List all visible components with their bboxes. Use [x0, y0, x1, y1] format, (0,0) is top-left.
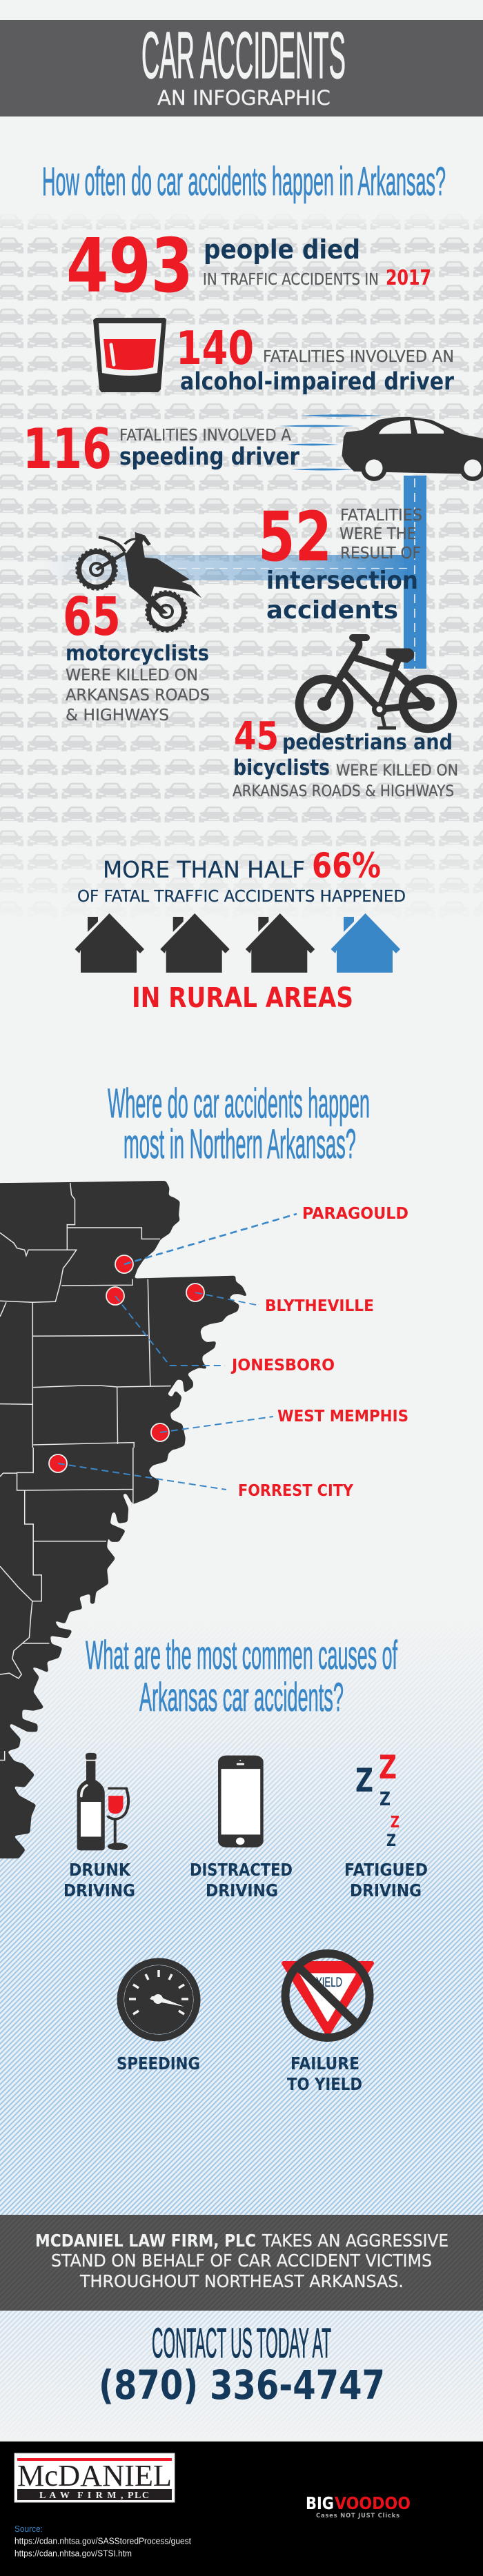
stat: 52 intersection accidents: intersection [266, 567, 418, 595]
icon: failure to yield sign [284, 1954, 372, 2038]
contact call to action: (870) 336-4747 [99, 2362, 385, 2408]
stat: 52 intersection accidents: 52 [258, 498, 332, 577]
sources: https://cdan.nhtsa.gov/SASStoredProcess/guest [14, 2535, 191, 2546]
icon: whiskey glass [93, 318, 166, 392]
map pin: West Memphis [151, 1423, 169, 1441]
label: fatigued driving: DRIVING [350, 1880, 422, 1900]
stat: 52 intersection accidents: WERE THE [339, 524, 416, 543]
stat: 65 motorcyclists: 65 [63, 587, 121, 648]
label: drunk driving: DRIVING [63, 1880, 135, 1900]
label: West Memphis: WEST MEMPHIS [277, 1406, 408, 1426]
stat: 45 pedestrians and bicyclists [233, 714, 458, 800]
stat: 493 people died [66, 223, 431, 310]
icon: failure to yield sign: YIELD [316, 1976, 342, 1990]
label: fatigued driving [344, 1860, 428, 1900]
map pin: Blytheville [186, 1284, 204, 1301]
logo: McDaniel Law Firm: McDANIEL [17, 2459, 172, 2493]
map of northeast Arkansas [0, 1181, 246, 1858]
stat: 45 pedestrians and bicyclists: pedestrians and [282, 730, 453, 755]
rural stat text: OF FATAL TRAFFIC ACCIDENTS HAPPENED [77, 886, 406, 906]
sources: https://cdan.nhtsa.gov/STSI.htm [14, 2548, 132, 2559]
rural stat text: 66% [312, 846, 381, 886]
label: Blytheville: BLYTHEVILLE [265, 1296, 374, 1315]
stat: 45 pedestrians and bicyclists: bicyclists [233, 755, 330, 780]
sources [14, 2524, 191, 2559]
hatched background [0, 1613, 483, 2442]
stat: 140 alcohol-impaired [176, 321, 455, 396]
stat: 52 intersection accidents: FATALITIES [340, 505, 422, 525]
stat: 116 speeding: FATALITIES INVOLVED A [119, 425, 291, 445]
label: distracted driving: DRIVING [206, 1880, 278, 1900]
car pattern background [0, 210, 483, 927]
stat: 493 people died: 2017 [386, 266, 431, 290]
icon: smartphone [218, 1756, 264, 1847]
stat: 65 motorcyclists [63, 587, 210, 724]
stat: 45 pedestrians and bicyclists: WERE KILLED ON [336, 762, 458, 780]
stat: 116 speeding: speeding driver [119, 443, 300, 471]
icon: wine bottle and glass [77, 1753, 128, 1850]
stat: 52 intersection accidents: accidents [266, 596, 398, 625]
law firm statement band: THROUGHOUT NORTHEAST ARKANSAS. [79, 2271, 404, 2291]
logo: Big Voodoo: VOODOO [335, 2493, 411, 2513]
icon: motorcycle [77, 532, 201, 631]
logo: Big Voodoo: Cases NOT JUST Clicks [316, 2513, 400, 2519]
logo: McDaniel Law Firm [14, 2453, 175, 2502]
icon: sleeping Zs: Z [355, 1762, 373, 1800]
label: fatigued driving: FATIGUED [344, 1860, 428, 1880]
subtitle: AN INFOGRAPHIC [157, 86, 331, 110]
road: intersection [41, 476, 426, 669]
sources: Source: [14, 2524, 43, 2534]
stat: 65 motorcyclists: motorcyclists [66, 641, 209, 666]
stat: 52 intersection accidents [258, 498, 422, 625]
map pin: Paragould [115, 1255, 133, 1273]
law firm statement band: TAKES AN AGGRESSIVE [262, 2231, 448, 2251]
stat: 140 alcohol-impaired: FATALITIES INVOLVED AN [263, 347, 454, 366]
header banner [0, 19, 483, 116]
contact call to action [99, 2320, 385, 2408]
stat: 140 alcohol-impaired: 140 [176, 321, 254, 375]
label: Paragould: PARAGOULD [302, 1204, 408, 1223]
label: Forrest City: FORREST CITY [238, 1481, 354, 1500]
logo: Big Voodoo [306, 2493, 411, 2519]
icon: sleeping Zs: Z [379, 1787, 391, 1810]
label: drunk driving: DRUNK [69, 1860, 131, 1880]
logo: McDaniel Law Firm: L A W F I R M , PLC [39, 2491, 149, 2501]
label: failure to yield: FAILURE [290, 2053, 359, 2073]
law firm statement band: MCDANIEL LAW FIRM, PLC [35, 2231, 256, 2251]
stat: 116 speeding: 116 [23, 417, 112, 481]
map pin: Jonesboro [106, 1287, 124, 1305]
logo: Big Voodoo: BIG [306, 2493, 334, 2513]
law firm statement band: STAND ON BEHALF OF CAR ACCIDENT VICTIMS [51, 2251, 432, 2271]
stat: 45 pedestrians and bicyclists: 45 [234, 714, 279, 759]
stat: 493 people died: IN TRAFFIC ACCIDENTS IN [203, 270, 379, 289]
stat: 65 motorcyclists: ARKANSAS ROADS [66, 685, 210, 704]
icon: speedometer [120, 1962, 197, 2038]
law firm statement band [0, 2215, 483, 2311]
rural stat text: MORE THAN HALF [103, 856, 305, 883]
heading: where [108, 1080, 370, 1167]
stat: 65 motorcyclists: WERE KILLED ON [66, 665, 198, 684]
map pin: Forrest City [49, 1454, 67, 1472]
icon row: houses [75, 913, 400, 973]
icon: bicycle [299, 638, 453, 729]
label: failure to yield: TO YIELD [287, 2074, 362, 2094]
heading: causes [86, 1633, 397, 1720]
footer [0, 2441, 483, 2576]
stat: 52 intersection accidents: RESULT OF [340, 543, 421, 562]
icon: sleeping Zs: Z [386, 1831, 396, 1850]
rural areas label: IN RURAL AREAS [132, 982, 353, 1014]
stat: 65 motorcyclists: & HIGHWAYS [66, 705, 169, 724]
label: failure to yield [287, 2053, 362, 2094]
label: distracted driving [190, 1860, 293, 1900]
stat: 493 people died: people died [204, 234, 360, 265]
callout lines [58, 1214, 297, 1490]
rural stat text [77, 846, 406, 906]
label: Jonesboro: JONESBORO [230, 1355, 335, 1375]
stat: 45 pedestrians and bicyclists: ARKANSAS ROADS & HIGHWAYS [233, 783, 454, 800]
stat: 116 speeding [23, 417, 300, 481]
icon: sleeping Zs: Z [391, 1814, 400, 1832]
stat: 493 people died: 493 [66, 223, 193, 310]
icon: speeding car [279, 414, 483, 481]
label: speeding: SPEEDING [117, 2053, 200, 2073]
icon: sleeping Zs [355, 1749, 400, 1850]
icon: sleeping Zs: Z [379, 1749, 397, 1787]
label: distracted driving: DISTRACTED [190, 1860, 293, 1880]
label: drunk driving [63, 1860, 135, 1900]
